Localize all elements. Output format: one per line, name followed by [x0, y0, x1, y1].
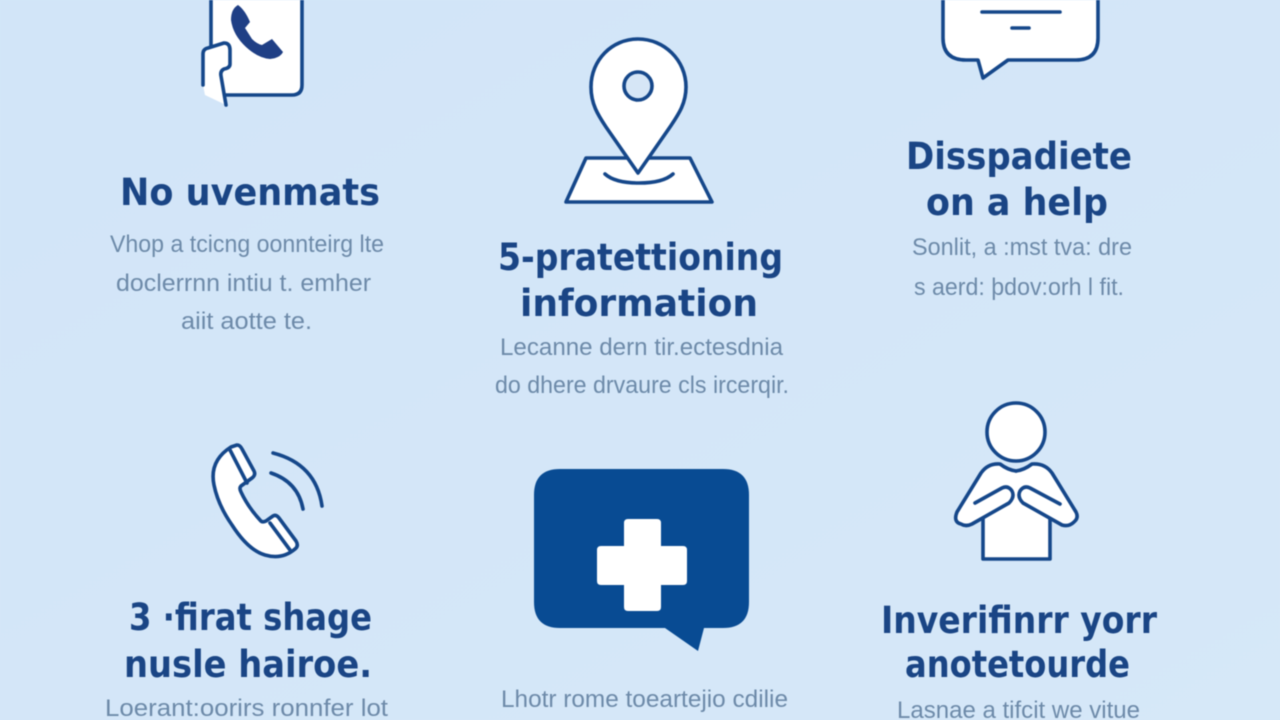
panel: bottom right person card	[881, 403, 1158, 720]
icon: person with hands on chest	[956, 403, 1077, 559]
panel: bottom left call card	[105, 445, 388, 720]
panel: top right chat card	[906, 0, 1132, 301]
heading: inverifinrr yorr anotetourde: anotetourde	[905, 643, 1130, 686]
heading: inverifinrr yorr anotetourde: Inverifinrr yorr	[881, 599, 1158, 642]
panel: centre location card	[495, 39, 789, 399]
heading: disspadiete on a help	[906, 135, 1132, 224]
icon: map pin	[566, 39, 712, 202]
heading: disspadiete on a help: Disspadiete	[906, 135, 1132, 178]
text block: left description: Vhop a tcicng oonnteirg lte	[110, 231, 384, 258]
heading: 3 first shage nusle hairoe: nusle hairoe.	[124, 643, 372, 686]
text block: right description	[912, 234, 1132, 301]
icon: speech bubble	[943, 0, 1098, 78]
text block: centre description: Lecanne dern tir.ectesdnia	[500, 334, 784, 361]
heading: no uvenmats: No uvenmats	[120, 171, 380, 214]
icon: telephone handset with signal waves	[213, 445, 322, 557]
icon: medical cross speech bubble	[534, 469, 749, 651]
text block: left description: doclerrnn intiu t. emher	[116, 270, 371, 297]
text block: centre description	[495, 334, 789, 399]
heading: 5-pratettioning information: information	[520, 282, 758, 325]
heading: 3 first shage nusle hairoe	[124, 596, 372, 686]
heading: 5-pratettioning information: 5-pratettioning	[498, 236, 783, 279]
heading: 3 first shage nusle hairoe: 3 ·firat shage	[129, 596, 372, 639]
text block: left description	[110, 231, 384, 335]
heading: 5-pratettioning information	[498, 236, 783, 325]
panel: top left phone card	[110, 0, 384, 335]
heading: disspadiete on a help: on a help	[926, 181, 1108, 224]
panel: bottom centre medical card	[501, 469, 788, 713]
text block: bottom centre description: Lhotr rome toeartejio cdilie	[501, 686, 788, 713]
icon: hand holding phone	[203, 0, 302, 105]
text block: right description: s aerd: þdov:orh l fit.	[914, 274, 1124, 301]
heading: inverifinrr yorr anotetourde	[881, 599, 1158, 686]
text block: left description: aiit aotte te.	[181, 308, 312, 335]
text block: right description: Sonlit, a :mst tva: dre	[912, 234, 1132, 261]
text block: centre description: do dhere drvaure cls ircerqir.	[495, 372, 789, 399]
